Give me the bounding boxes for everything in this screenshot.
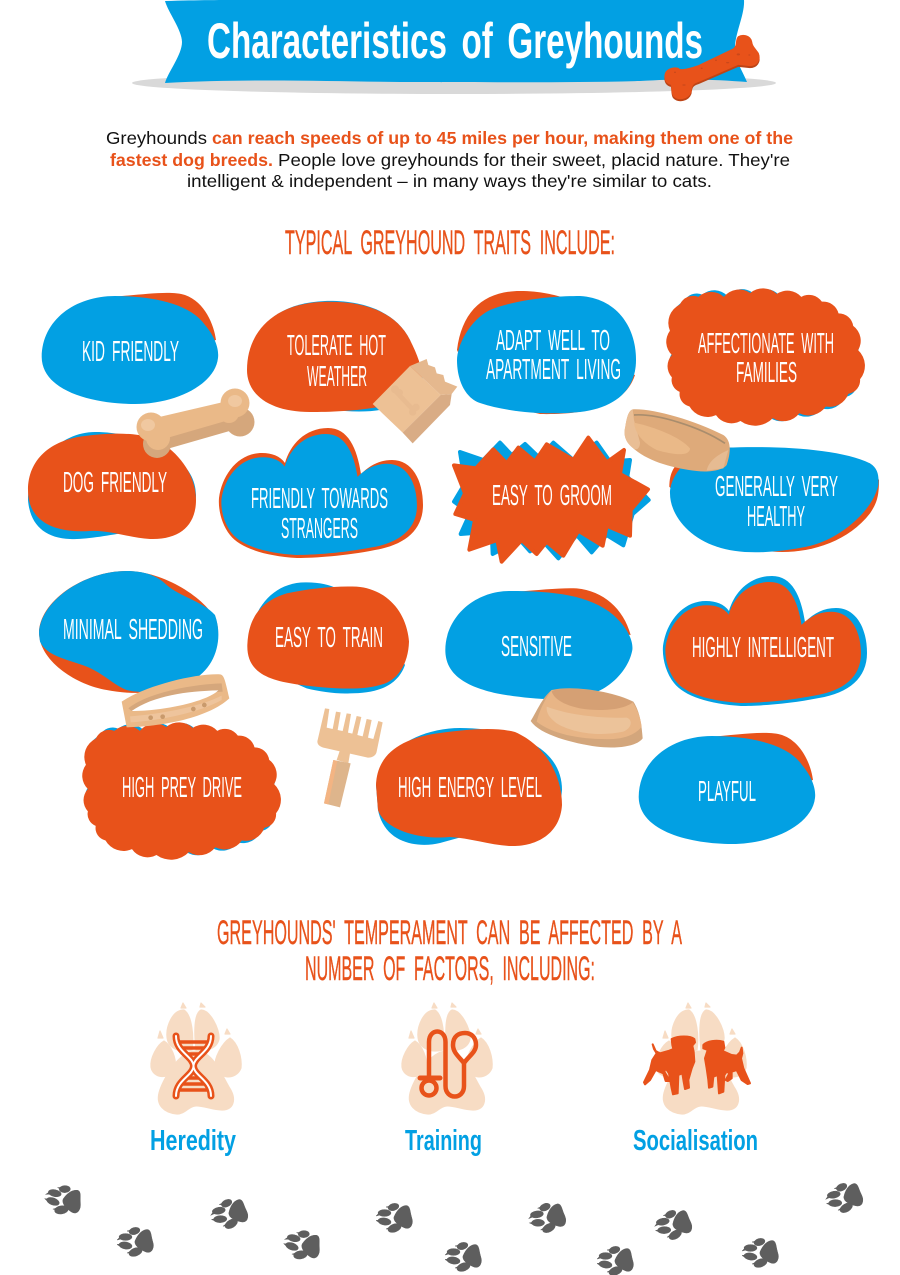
- factor: heredity: [150, 1003, 241, 1157]
- icon: dna helix: [176, 1036, 211, 1096]
- trait: sensitive: SENSITIVE: [501, 631, 572, 663]
- trait: tolerate hot weather: WEATHER: [307, 361, 367, 393]
- trait: friendly towards strangers: [219, 428, 423, 558]
- icon: treat box: [373, 359, 457, 443]
- label: Training: [405, 1125, 482, 1157]
- intro text: can reach speeds of up to 45 miles per hour, making them one of the: [212, 128, 793, 148]
- trait: minimal shedding: MINIMAL SHEDDING: [63, 614, 203, 646]
- trait: easy to groom: [454, 438, 649, 562]
- icon: grooming rake: [317, 708, 383, 807]
- trait: high energy level: HIGH ENERGY LEVEL: [398, 772, 542, 804]
- trait: affectionate with families: FAMILIES: [736, 357, 797, 389]
- trait: adapt well to apartment living: [457, 291, 636, 414]
- trait: easy to train: [247, 582, 409, 693]
- trait: dog friendly: [28, 432, 196, 539]
- label: Socialisation: [633, 1125, 758, 1157]
- icon: paw background: [402, 1003, 492, 1114]
- icon: paw background: [656, 1003, 746, 1114]
- factor: socialisation: [633, 1003, 758, 1157]
- trait: friendly towards strangers: STRANGERS: [281, 513, 358, 545]
- title banner: [132, 0, 776, 94]
- intro text: [106, 128, 793, 191]
- icon: food tray: [625, 409, 730, 471]
- trait: high energy level: [376, 728, 562, 846]
- icon: collar: [122, 674, 229, 727]
- trait: dog friendly: DOG FRIENDLY: [63, 467, 167, 499]
- icon: food bowl: [531, 688, 643, 748]
- factor: training: [402, 1003, 492, 1157]
- trait: high prey drive: [81, 719, 282, 863]
- trait: tolerate hot weather: TOLERATE HOT: [287, 330, 386, 362]
- intro text: People love greyhounds for their sweet, placid nature. They're: [278, 150, 790, 170]
- trait: playful: [639, 733, 815, 844]
- trait: high prey drive: HIGH PREY DRIVE: [122, 772, 242, 804]
- icon: paw background: [151, 1003, 241, 1114]
- label: Heredity: [150, 1125, 236, 1157]
- trait: minimal shedding: [39, 571, 218, 693]
- trait: affectionate with families: [665, 285, 866, 429]
- icon: two dogs: [644, 1036, 750, 1094]
- icon: orange bone: [665, 35, 759, 101]
- icon: tan bone: [136, 388, 254, 458]
- trait: highly intelligent: [663, 576, 867, 706]
- trait: easy to train: EASY TO TRAIN: [275, 622, 383, 654]
- intro text: intelligent & independent – in many ways they're similar to cats.: [187, 171, 712, 191]
- trait: kid friendly: [42, 293, 218, 404]
- grey paw prints: [42, 1179, 865, 1275]
- trait: friendly towards strangers: FRIENDLY TOWARDS: [251, 483, 388, 515]
- trait: generally very healthy: [669, 447, 879, 552]
- trait: generally very healthy: HEALTHY: [747, 501, 805, 533]
- trait: adapt well to apartment living: APARTMENT LIVING: [486, 354, 621, 386]
- trait: playful: PLAYFUL: [698, 776, 756, 808]
- trait: easy to groom: EASY TO GROOM: [492, 480, 612, 512]
- trait: tolerate hot weather: [247, 301, 425, 412]
- trait: kid friendly: KID FRIENDLY: [82, 336, 179, 368]
- trait: adapt well to apartment living: ADAPT WELL TO: [496, 325, 610, 357]
- intro text: Greyhounds: [106, 128, 207, 148]
- icon: leash: [420, 1032, 476, 1096]
- trait: sensitive: [445, 588, 632, 699]
- heading: temperament factors: [217, 914, 682, 988]
- intro text: fastest dog breeds.: [110, 150, 273, 170]
